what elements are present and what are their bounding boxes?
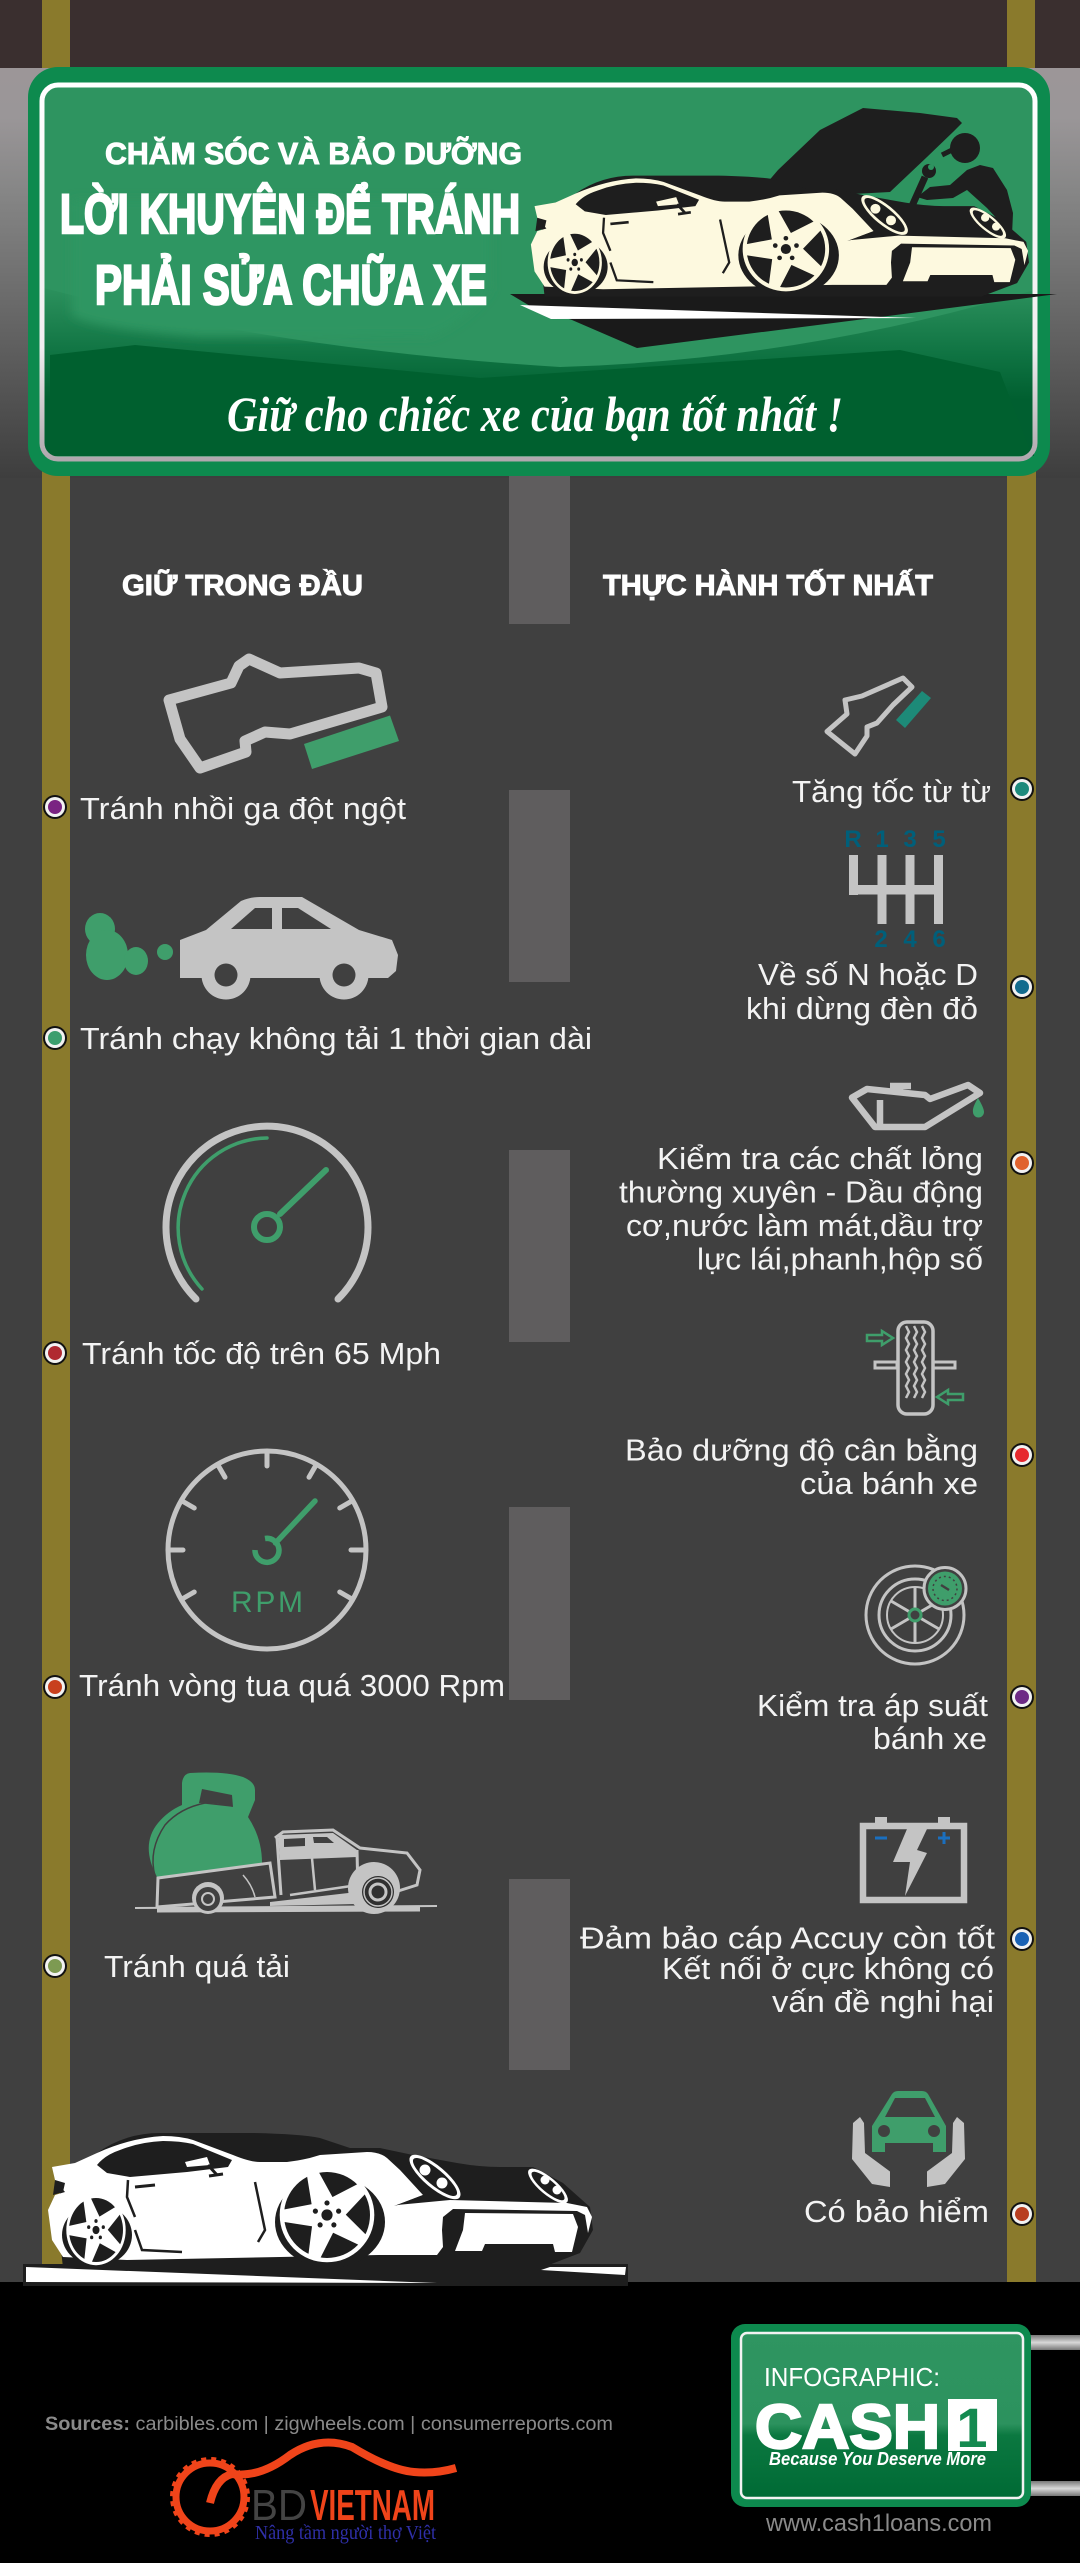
logo sign: Cash 1 — [731, 2324, 1080, 2507]
icon: gear shifter: 1 — [875, 826, 889, 853]
marker dot — [1010, 777, 1034, 801]
icon: wheel alignment — [867, 1322, 963, 1414]
item: sudden acceleration — [43, 659, 406, 826]
logo: OBD Vietnam — [172, 2442, 456, 2544]
tagline: Giữ cho chiếc xe của bạn tốt nhất ! — [227, 386, 843, 442]
title: eyebrow: CHĂM SÓC VÀ BẢO DƯỠNG — [105, 135, 522, 171]
logo sign: Cash 1: 1 — [956, 2396, 988, 2459]
tip: neutral at red light — [746, 826, 1034, 1026]
label — [580, 1920, 995, 2019]
marker dot — [43, 795, 67, 819]
logo sign: Cash 1: INFOGRAPHIC: — [764, 2362, 940, 2392]
label: Bảo dưỡng độ cân bằng — [625, 1433, 978, 1468]
marker dot — [43, 1954, 67, 1978]
label: Tránh nhồi ga đột ngột — [80, 791, 406, 826]
item: overload — [43, 1772, 437, 1984]
logo: OBD Vietnam: VIETNAM — [310, 2481, 435, 2530]
label — [757, 1688, 988, 1756]
heading: left column: GIỮ TRONG ĐẦU — [122, 568, 363, 602]
label: Kiểm tra áp suất — [757, 1688, 988, 1723]
label — [625, 1433, 978, 1501]
label: Kết nối ở cực không có — [662, 1951, 994, 1986]
label: Tăng tốc từ từ — [792, 774, 991, 809]
panel: header sign — [28, 67, 1057, 476]
label: Tránh chạy không tải 1 thời gian dài — [80, 1021, 592, 1056]
marker dot — [1010, 2202, 1034, 2226]
marker dot — [1010, 975, 1034, 999]
marker dot — [43, 1026, 67, 1050]
icon: gear shifter: 5 — [932, 826, 946, 853]
icon: car with exhaust — [85, 897, 398, 1000]
label: thường xuyên - Dầu động — [619, 1174, 983, 1210]
icon: car in hands — [852, 2091, 965, 2187]
tip: accelerate gradually — [792, 678, 1034, 809]
tip: battery — [580, 1817, 1034, 2019]
website url: www.cash1loans.com — [765, 2510, 992, 2537]
label: khi dừng đèn đỏ — [746, 991, 978, 1026]
icon: gear shifter: R — [844, 826, 862, 853]
label: vấn đề nghi hại — [772, 1984, 994, 2019]
icon: speedometer — [166, 1126, 368, 1299]
icon: pedal — [827, 678, 931, 754]
label: Đảm bảo cáp Accuy còn tốt — [580, 1920, 995, 1956]
logo: OBD Vietnam: Nâng tầm người thợ Việt — [255, 2522, 436, 2544]
label — [746, 957, 978, 1026]
marker dot — [1010, 1685, 1034, 1709]
icon: gear shifter: 3 — [903, 826, 917, 853]
label: Tránh vòng tua quá 3000 Rpm — [79, 1668, 505, 1703]
label: Có bảo hiểm — [804, 2194, 989, 2229]
icon: oil can — [852, 1085, 984, 1127]
label — [619, 1141, 983, 1276]
logo: OBD Vietnam: BD — [251, 2481, 307, 2530]
icon: kettlebell on pickup — [135, 1772, 437, 1914]
label: lực lái,phanh,hộp số — [697, 1242, 983, 1276]
marker dot — [1010, 1927, 1034, 1951]
icon: gear shifter — [844, 826, 946, 953]
logo sign: Cash 1: CASH — [755, 2393, 940, 2462]
label: bánh xe — [873, 1721, 987, 1756]
icon: tyre with gauge — [866, 1566, 966, 1664]
item: rpm — [43, 1451, 505, 1703]
title: line 1: LỜI KHUYÊN ĐỂ TRÁNH — [60, 182, 520, 245]
item: speed — [43, 1126, 441, 1371]
icon: gas pedal — [169, 659, 399, 769]
label: của bánh xe — [800, 1466, 978, 1501]
sources text: Sources: carbibles.com | zigwheels.com | consumerreports.com — [45, 2414, 613, 2435]
marker dot — [43, 1675, 67, 1699]
label: Tránh quá tải — [104, 1949, 290, 1984]
tip: tyre pressure — [757, 1566, 1034, 1756]
footer band — [0, 2282, 1080, 2563]
tip: wheel balance — [625, 1322, 1034, 1501]
marker dot — [1010, 1443, 1034, 1467]
label: Kiểm tra các chất lỏng — [657, 1141, 983, 1176]
title: line 2: PHẢI SỬA CHỮA XE — [95, 253, 487, 316]
item: idling — [43, 897, 592, 1056]
marker dot — [1010, 1151, 1034, 1175]
icon: gear shifter: 4 — [903, 926, 917, 953]
heading: right column: THỰC HÀNH TỐT NHẤT — [603, 568, 933, 602]
icon: battery — [863, 1817, 964, 1900]
bottom white car — [23, 2133, 628, 2286]
marker dot — [43, 1341, 67, 1365]
icon: tachometer: RPM — [231, 1586, 303, 1619]
tip: insurance — [804, 2091, 1034, 2229]
icon: gear shifter: 6 — [932, 926, 946, 953]
icon: gear shifter: 2 — [874, 926, 888, 953]
label: Về số N hoặc D — [758, 957, 978, 992]
label: Tránh tốc độ trên 65 Mph — [82, 1336, 441, 1371]
label: cơ,nước làm mát,dầu trợ — [626, 1208, 983, 1243]
illustration: cream car with mechanic — [510, 108, 1057, 348]
tip: check fluids — [619, 1085, 1034, 1276]
icon: tachometer — [168, 1451, 366, 1649]
logo sign: Cash 1: Because You Deserve More — [769, 2449, 986, 2469]
